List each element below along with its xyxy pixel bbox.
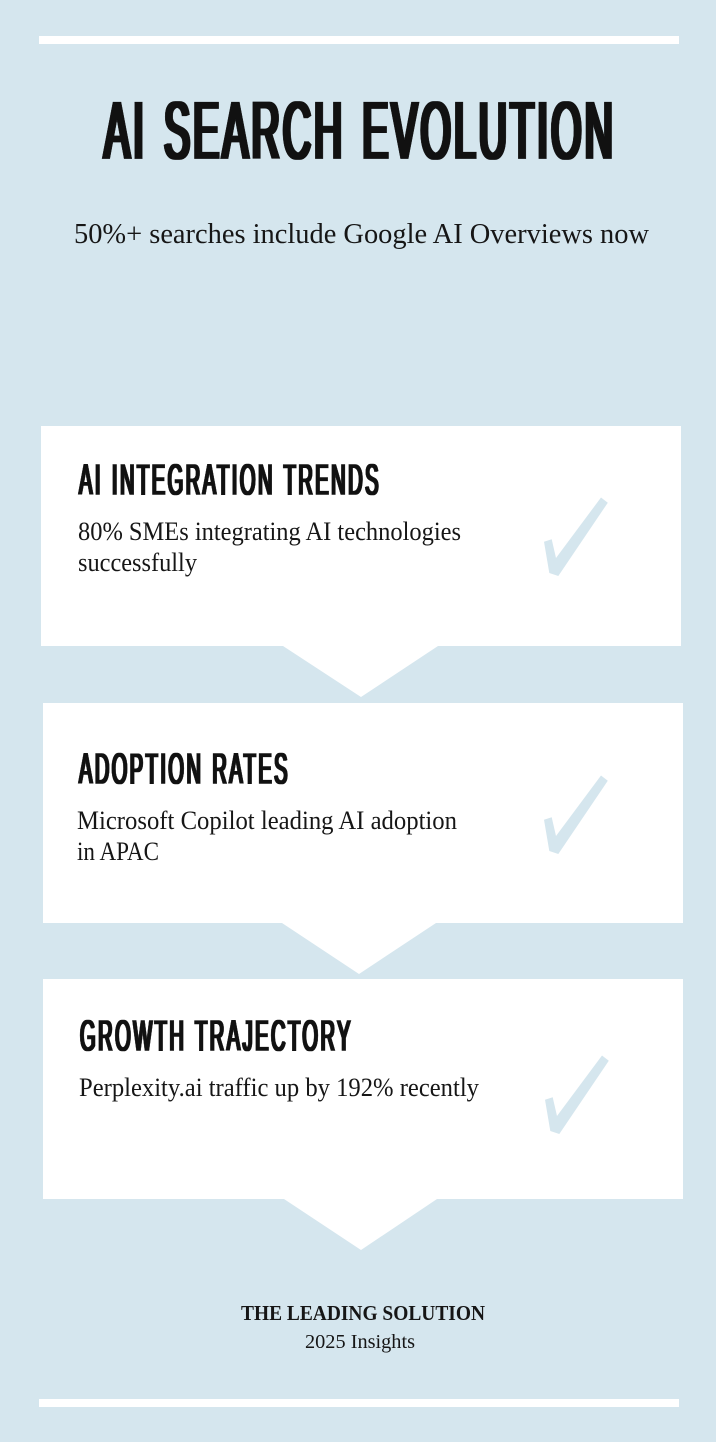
text block: AI integration: 80% SMEs integrating AI technologies [78,517,461,546]
panel: adoption rates [43,703,683,974]
text block: AI integration [78,517,461,577]
card background with arrow [41,426,681,697]
text block: growth: Perplexity.ai traffic up by 192% recently [79,1073,479,1102]
icon: check mark [545,1056,609,1134]
card background with arrow [43,979,683,1250]
panel: growth trajectory [43,979,683,1250]
icon: check mark [544,776,608,854]
panel: AI integration trends [41,426,681,697]
card background with arrow [43,703,683,974]
footer subtitle: 2025 Insights [305,1331,415,1353]
text block: adoption: in APAC [77,837,159,866]
panel: adoption rates: ADOPTION RATES [79,745,290,794]
text block: adoption [77,806,457,866]
footer [241,1301,485,1353]
text block: AI integration: successfully [78,548,197,577]
subtitle: 50%+ searches include Google AI Overviews now [74,218,649,250]
text block: adoption: Microsoft Copilot leading AI adoption [77,806,457,835]
icon: check mark [544,498,608,576]
panel: growth trajectory: GROWTH TRAJECTORY [80,1012,353,1061]
footer title: THE LEADING SOLUTION [241,1301,485,1325]
